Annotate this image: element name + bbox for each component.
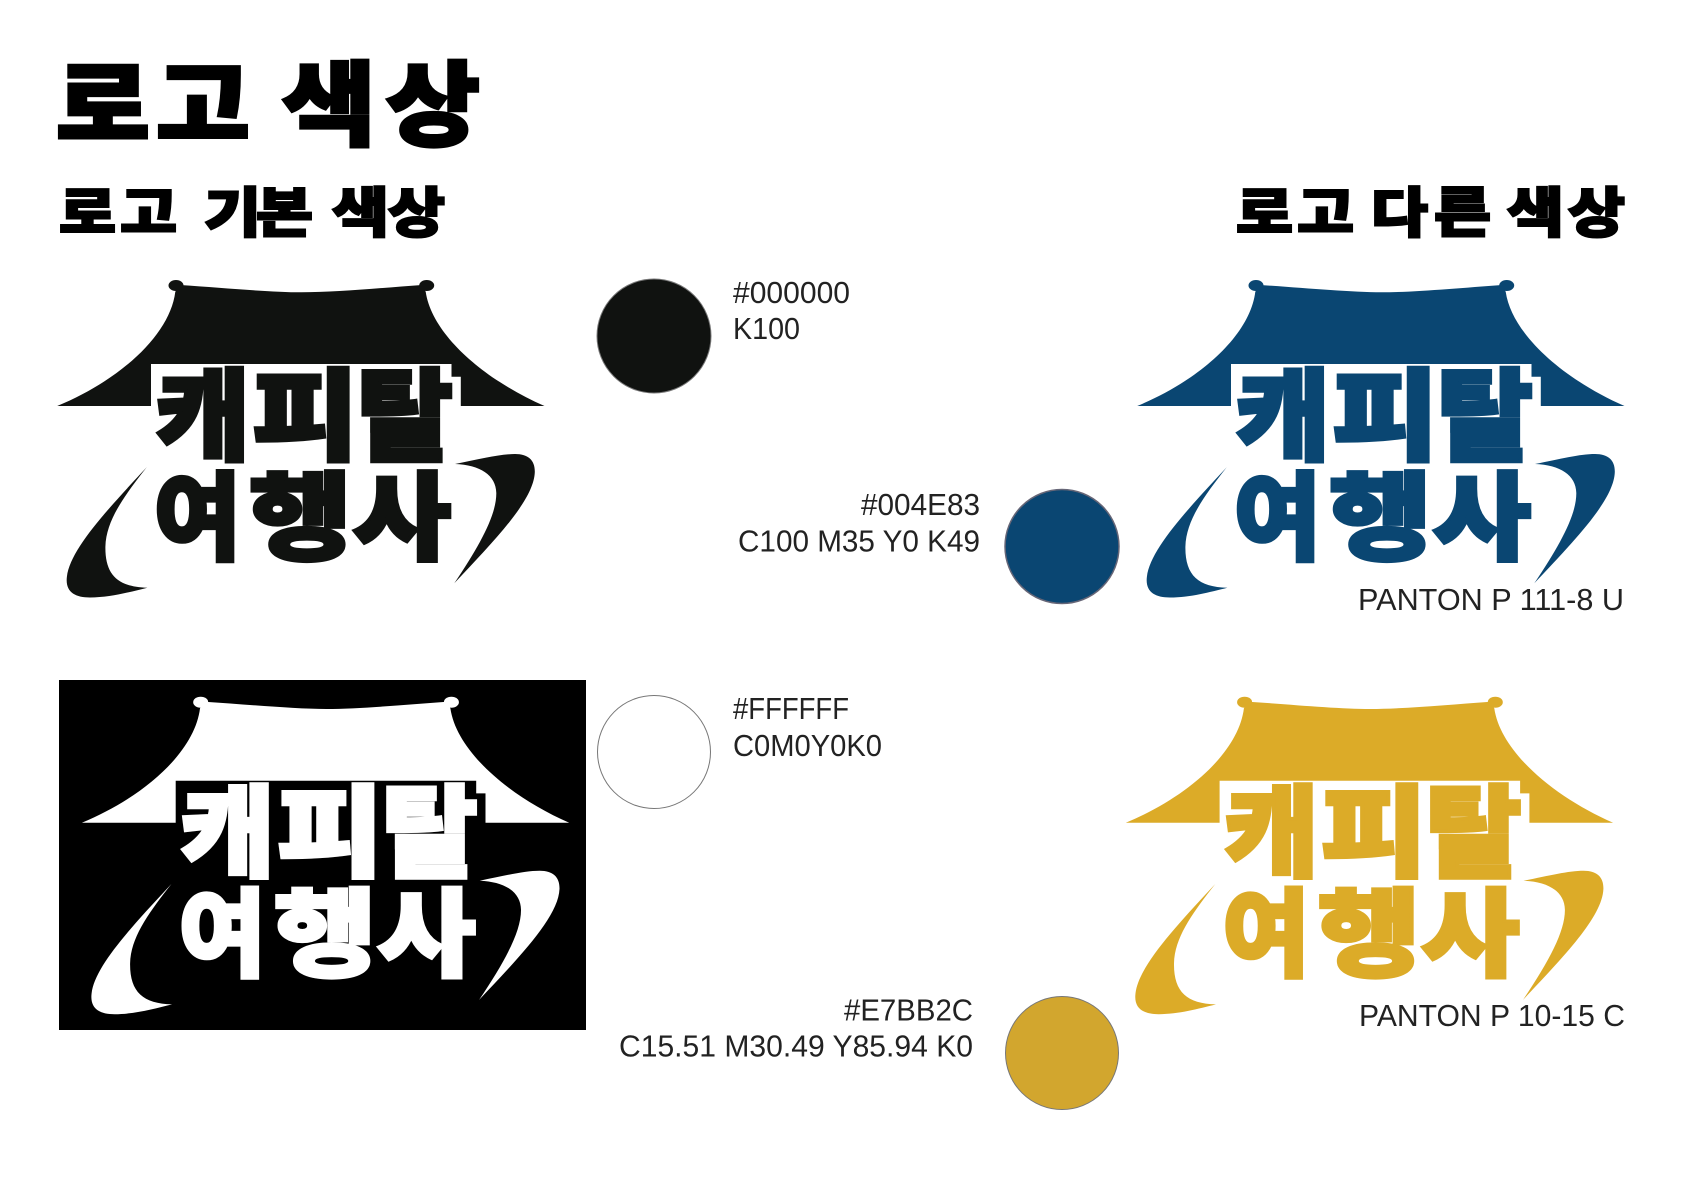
logo: black: 피 — [252, 362, 359, 473]
logo: gold: 여 — [1222, 883, 1310, 990]
logo: white on black: 사 — [377, 882, 476, 989]
logo: white on black: 피 — [277, 778, 383, 890]
logo: blue: 피 — [1332, 362, 1439, 473]
logo: black: 캐 — [155, 361, 250, 474]
logo: gold — [1126, 697, 1613, 1014]
title: 로고색상 — [56, 55, 480, 158]
logo: white on black: 탈 — [381, 778, 478, 890]
label: white codes — [733, 691, 882, 763]
logo: gold: 탈 — [1425, 778, 1522, 890]
label: black codes: #000000 — [733, 275, 850, 310]
logo: gold: 사 — [1421, 882, 1520, 989]
label: gold codes: C15.51 M30.49 Y85.94 K0 — [619, 1028, 973, 1064]
swatch: gold — [1006, 996, 1118, 1110]
swatch: black — [597, 279, 711, 393]
logo: gold: 피 — [1321, 778, 1427, 890]
label: blue codes: C100 M35 Y0 K49 — [738, 524, 980, 558]
label: gold pantone: PANTON P 10-15 C — [1359, 998, 1625, 1033]
swatch: white — [598, 696, 710, 808]
logo: blue: 행 — [1329, 466, 1432, 573]
logo: blue: 탈 — [1436, 361, 1533, 473]
label: gold codes: #E7BB2C — [844, 992, 973, 1028]
panel: black background — [59, 680, 586, 1030]
label: white codes: C0M0Y0K0 — [733, 728, 882, 763]
logo: white on black: 여 — [179, 883, 266, 990]
logo: black: 탈 — [356, 361, 453, 473]
label: blue codes — [738, 487, 980, 558]
subheading: default logo colour: 로고기본색상 — [59, 184, 445, 244]
logo: black: 여 — [154, 467, 241, 573]
label: gold codes — [619, 992, 973, 1064]
label: blue pantone: PANTON P 111-8 U — [1358, 582, 1624, 617]
logo: blue: 사 — [1433, 465, 1531, 573]
subheading: alternate logo colour: 로고다른색상 — [1236, 184, 1625, 244]
logo: white on black: 캐 — [180, 778, 274, 890]
logo: blue — [1137, 280, 1624, 598]
logo: white on black — [82, 697, 569, 1014]
logo: black: 행 — [249, 466, 352, 573]
label: white codes: #FFFFFF — [733, 691, 849, 726]
label: black codes — [733, 275, 850, 346]
label: blue codes: #004E83 — [861, 487, 980, 522]
logo: black — [57, 280, 544, 598]
logo: blue: 캐 — [1235, 361, 1330, 474]
logo: gold: 캐 — [1224, 778, 1318, 890]
label: black codes: K100 — [733, 311, 800, 346]
logo: gold: 행 — [1318, 883, 1421, 990]
swatch: blue — [1005, 490, 1119, 604]
logo: blue: 여 — [1234, 467, 1321, 573]
logo: black: 사 — [353, 465, 451, 573]
logo: white on black: 행 — [274, 883, 377, 990]
